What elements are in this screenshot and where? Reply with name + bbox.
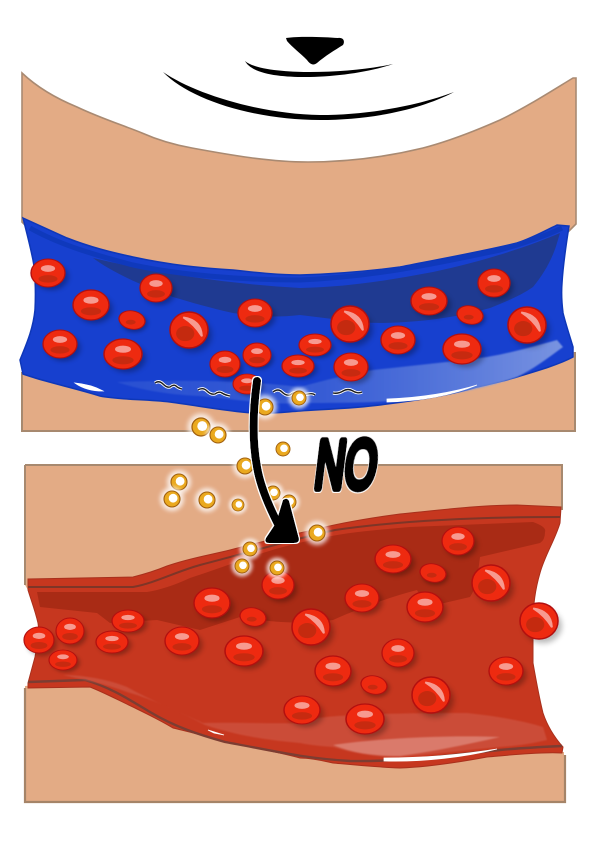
nitric oxide particles — [160, 388, 329, 578]
red blood cells: red vessel — [24, 527, 562, 737]
icon: lower lip line — [163, 72, 454, 120]
vessel highlight: white glint — [208, 730, 497, 761]
vessel inner wall line — [30, 228, 562, 280]
vessel highlight: lower wall sheen — [117, 340, 563, 403]
panel: constricted vessel — [20, 73, 576, 431]
vessel highlight: white glints — [75, 383, 477, 402]
lower skin layer — [25, 680, 564, 801]
lower skin layer — [22, 352, 574, 431]
vessel: blue — [20, 218, 573, 413]
vessel wall lines — [28, 517, 560, 587]
upper skin layer — [25, 465, 562, 590]
vessel shading: dark upper region — [37, 522, 545, 630]
arrow: NO travels from blue vessel to red vessel — [254, 381, 299, 543]
vessel: red — [28, 505, 563, 768]
upper skin layer — [22, 73, 576, 290]
vessel shading: dark upper wall — [93, 233, 560, 323]
icon: upper lip line — [245, 61, 393, 77]
vessel highlight: lower wall sheen — [63, 675, 547, 757]
panel: dilated vessel — [24, 465, 565, 802]
vessel highlight: lighter band — [333, 736, 500, 756]
icon: nose — [286, 37, 344, 64]
red blood cells: blue vessel — [31, 259, 550, 396]
squiggles: nitric oxide signal molecules — [155, 382, 362, 396]
label: NO: NO — [311, 426, 382, 502]
